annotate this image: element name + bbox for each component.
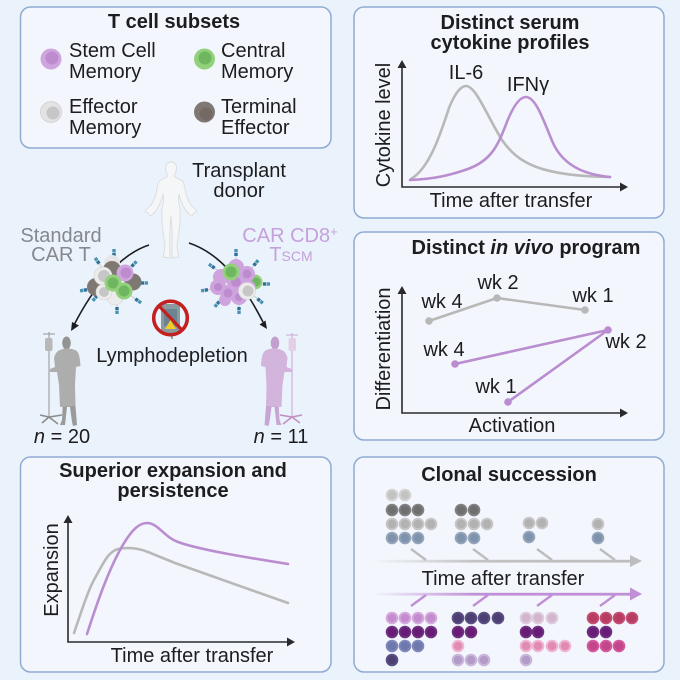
line chart: cytokine level over time: IFNγ bbox=[507, 74, 549, 96]
line chart: cytokine level over time: IL-6 bbox=[449, 62, 483, 84]
label: CAR CD8+ TSCM: + bbox=[330, 224, 338, 239]
heading: clonal succession: Clonal succession bbox=[421, 464, 597, 486]
heading: T cell subsets: T cell subsets bbox=[108, 11, 240, 33]
label: standard CAR T: CAR T bbox=[31, 244, 91, 266]
arrow: donor to standard CAR T patient bbox=[71, 245, 149, 331]
icon: patient standard CAR T bbox=[40, 332, 80, 426]
icon: patient CAR TSCM bbox=[261, 333, 302, 426]
icon: no lymphodepletion bbox=[154, 301, 187, 339]
legend: stem cell memory: Stem Cell bbox=[69, 40, 156, 62]
clones: CAR TSCM timepoint 2 bbox=[452, 612, 504, 666]
line chart: differentiation vs activation: wk 1 bbox=[474, 376, 517, 398]
label: transplant donor: Transplant bbox=[192, 160, 286, 182]
legend: stem cell memory bbox=[40, 40, 156, 83]
legend: stem cell memory: Memory bbox=[69, 61, 141, 83]
axis label: time after transfer: Time after transfer bbox=[422, 568, 585, 590]
clones: CAR TSCM timepoint 4 bbox=[587, 612, 638, 652]
clones: standard CAR T timepoint 2 bbox=[455, 504, 493, 544]
heading: serum cytokine profiles: cytokine profiles bbox=[431, 32, 589, 54]
panel: T cell subsets bbox=[20, 7, 331, 148]
line chart: differentiation vs activation: wk 4 bbox=[420, 291, 463, 313]
label: n = 20: n = 20 bbox=[34, 426, 90, 448]
line chart: cytokine level over time: Time after transfer bbox=[430, 190, 593, 212]
clones: CAR TSCM timepoint 1 bbox=[386, 612, 437, 666]
line chart: differentiation vs activation: wk 2 bbox=[476, 272, 519, 294]
icon: transplant donor body bbox=[145, 162, 197, 258]
label: transplant donor: donor bbox=[213, 180, 265, 202]
legend: terminal effector: Terminal bbox=[221, 96, 297, 118]
line chart: expansion over time: Time after transfer bbox=[111, 645, 274, 667]
line chart: differentiation vs activation: wk 4 bbox=[422, 339, 465, 361]
label: n = 11: n = 11 bbox=[254, 426, 308, 448]
panel: distinct serum cytokine profiles bbox=[354, 7, 664, 218]
label: CAR CD8+ TSCM: TSCM bbox=[269, 244, 313, 266]
heading: superior expansion and persistence: Superior expansion and bbox=[59, 460, 287, 482]
legend: effector memory bbox=[40, 96, 141, 139]
label: CAR CD8+ TSCM: CAR CD8 bbox=[242, 224, 338, 247]
arrow: standard CAR T timeline bbox=[372, 549, 642, 567]
legend: central memory: Memory bbox=[221, 61, 293, 83]
line chart: differentiation vs activation bbox=[373, 272, 647, 437]
line chart: cytokine level over time bbox=[373, 60, 628, 212]
legend: central memory bbox=[194, 40, 293, 83]
line chart: differentiation vs activation: Differentiation bbox=[373, 287, 395, 411]
label: standard CAR T: Standard bbox=[20, 225, 102, 247]
legend: terminal effector: Effector bbox=[221, 117, 290, 139]
heading: superior expansion and persistence: persistence bbox=[117, 480, 229, 502]
icon: CAR TSCM cell cluster bbox=[201, 249, 270, 314]
legend: terminal effector bbox=[194, 96, 297, 139]
panel: clonal succession bbox=[354, 457, 664, 672]
clones: CAR TSCM timepoint 3 bbox=[520, 612, 571, 666]
label: lymphodepletion: Lymphodepletion bbox=[96, 345, 248, 367]
panel: superior expansion and persistence bbox=[20, 457, 331, 672]
clones: standard CAR T timepoint 4 bbox=[592, 518, 604, 544]
line chart: differentiation vs activation: wk 2 bbox=[604, 331, 647, 353]
clones: standard CAR T timepoint 1 bbox=[386, 489, 437, 544]
line chart: differentiation vs activation: wk 1 bbox=[571, 285, 614, 307]
line chart: expansion over time: Expansion bbox=[41, 523, 63, 617]
arrow: donor to CAR TSCM patient bbox=[189, 243, 267, 329]
legend: effector memory: Effector bbox=[69, 96, 138, 118]
arrow: CAR TSCM timeline bbox=[372, 588, 642, 606]
panel: distinct in vivo program bbox=[354, 232, 664, 440]
heading: serum cytokine profiles: Distinct serum bbox=[441, 12, 579, 34]
icon: standard CAR T cell cluster bbox=[80, 249, 148, 314]
line chart: differentiation vs activation: Activation bbox=[469, 415, 555, 437]
line chart: expansion over time bbox=[41, 515, 295, 667]
legend: central memory: Central bbox=[221, 40, 285, 62]
line chart: cytokine level over time: Cytokine level bbox=[373, 63, 395, 187]
clones: standard CAR T timepoint 3 bbox=[523, 517, 548, 543]
legend: effector memory: Memory bbox=[69, 117, 141, 139]
heading: distinct in vivo program: Distinct in vivo program bbox=[412, 237, 640, 259]
